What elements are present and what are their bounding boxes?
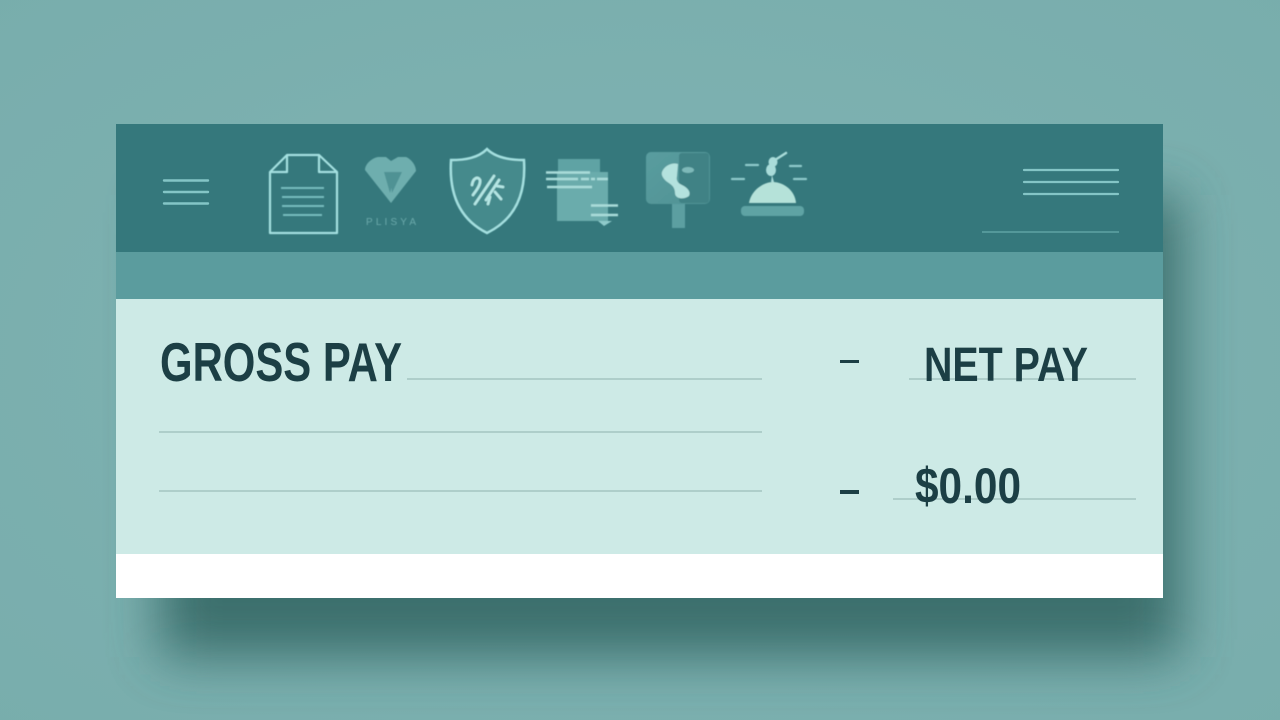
icon: shield xyxy=(451,149,524,233)
icon: stacked pages with text lines xyxy=(546,159,618,226)
dash: net pay row xyxy=(840,360,859,363)
panel: secondary band xyxy=(116,252,1163,299)
card shadow xyxy=(160,195,1180,657)
icon: menu lines left xyxy=(164,180,208,204)
dash: amount row xyxy=(840,490,859,494)
heading: gross pay: GROSS PAY xyxy=(160,331,402,393)
icon: diamond heart with label xyxy=(365,157,416,228)
decorative arrow tip xyxy=(598,221,612,226)
panel: footer strip xyxy=(116,554,1163,598)
icon: menu lines right xyxy=(1024,170,1118,194)
panel: pay details xyxy=(116,299,1163,554)
pay stub card xyxy=(116,124,1163,598)
form rule lines xyxy=(159,379,1136,499)
icon: board on post with blob xyxy=(646,152,710,228)
icon: diamond heart with label: PLISYA xyxy=(366,217,416,228)
icon: service bell xyxy=(732,153,806,216)
header rule xyxy=(982,231,1119,233)
icon: document xyxy=(270,155,337,233)
heading: net pay: NET PAY xyxy=(924,339,1088,392)
panel: header band xyxy=(116,124,1163,252)
amount: net pay value: $0.00 xyxy=(915,458,1021,514)
